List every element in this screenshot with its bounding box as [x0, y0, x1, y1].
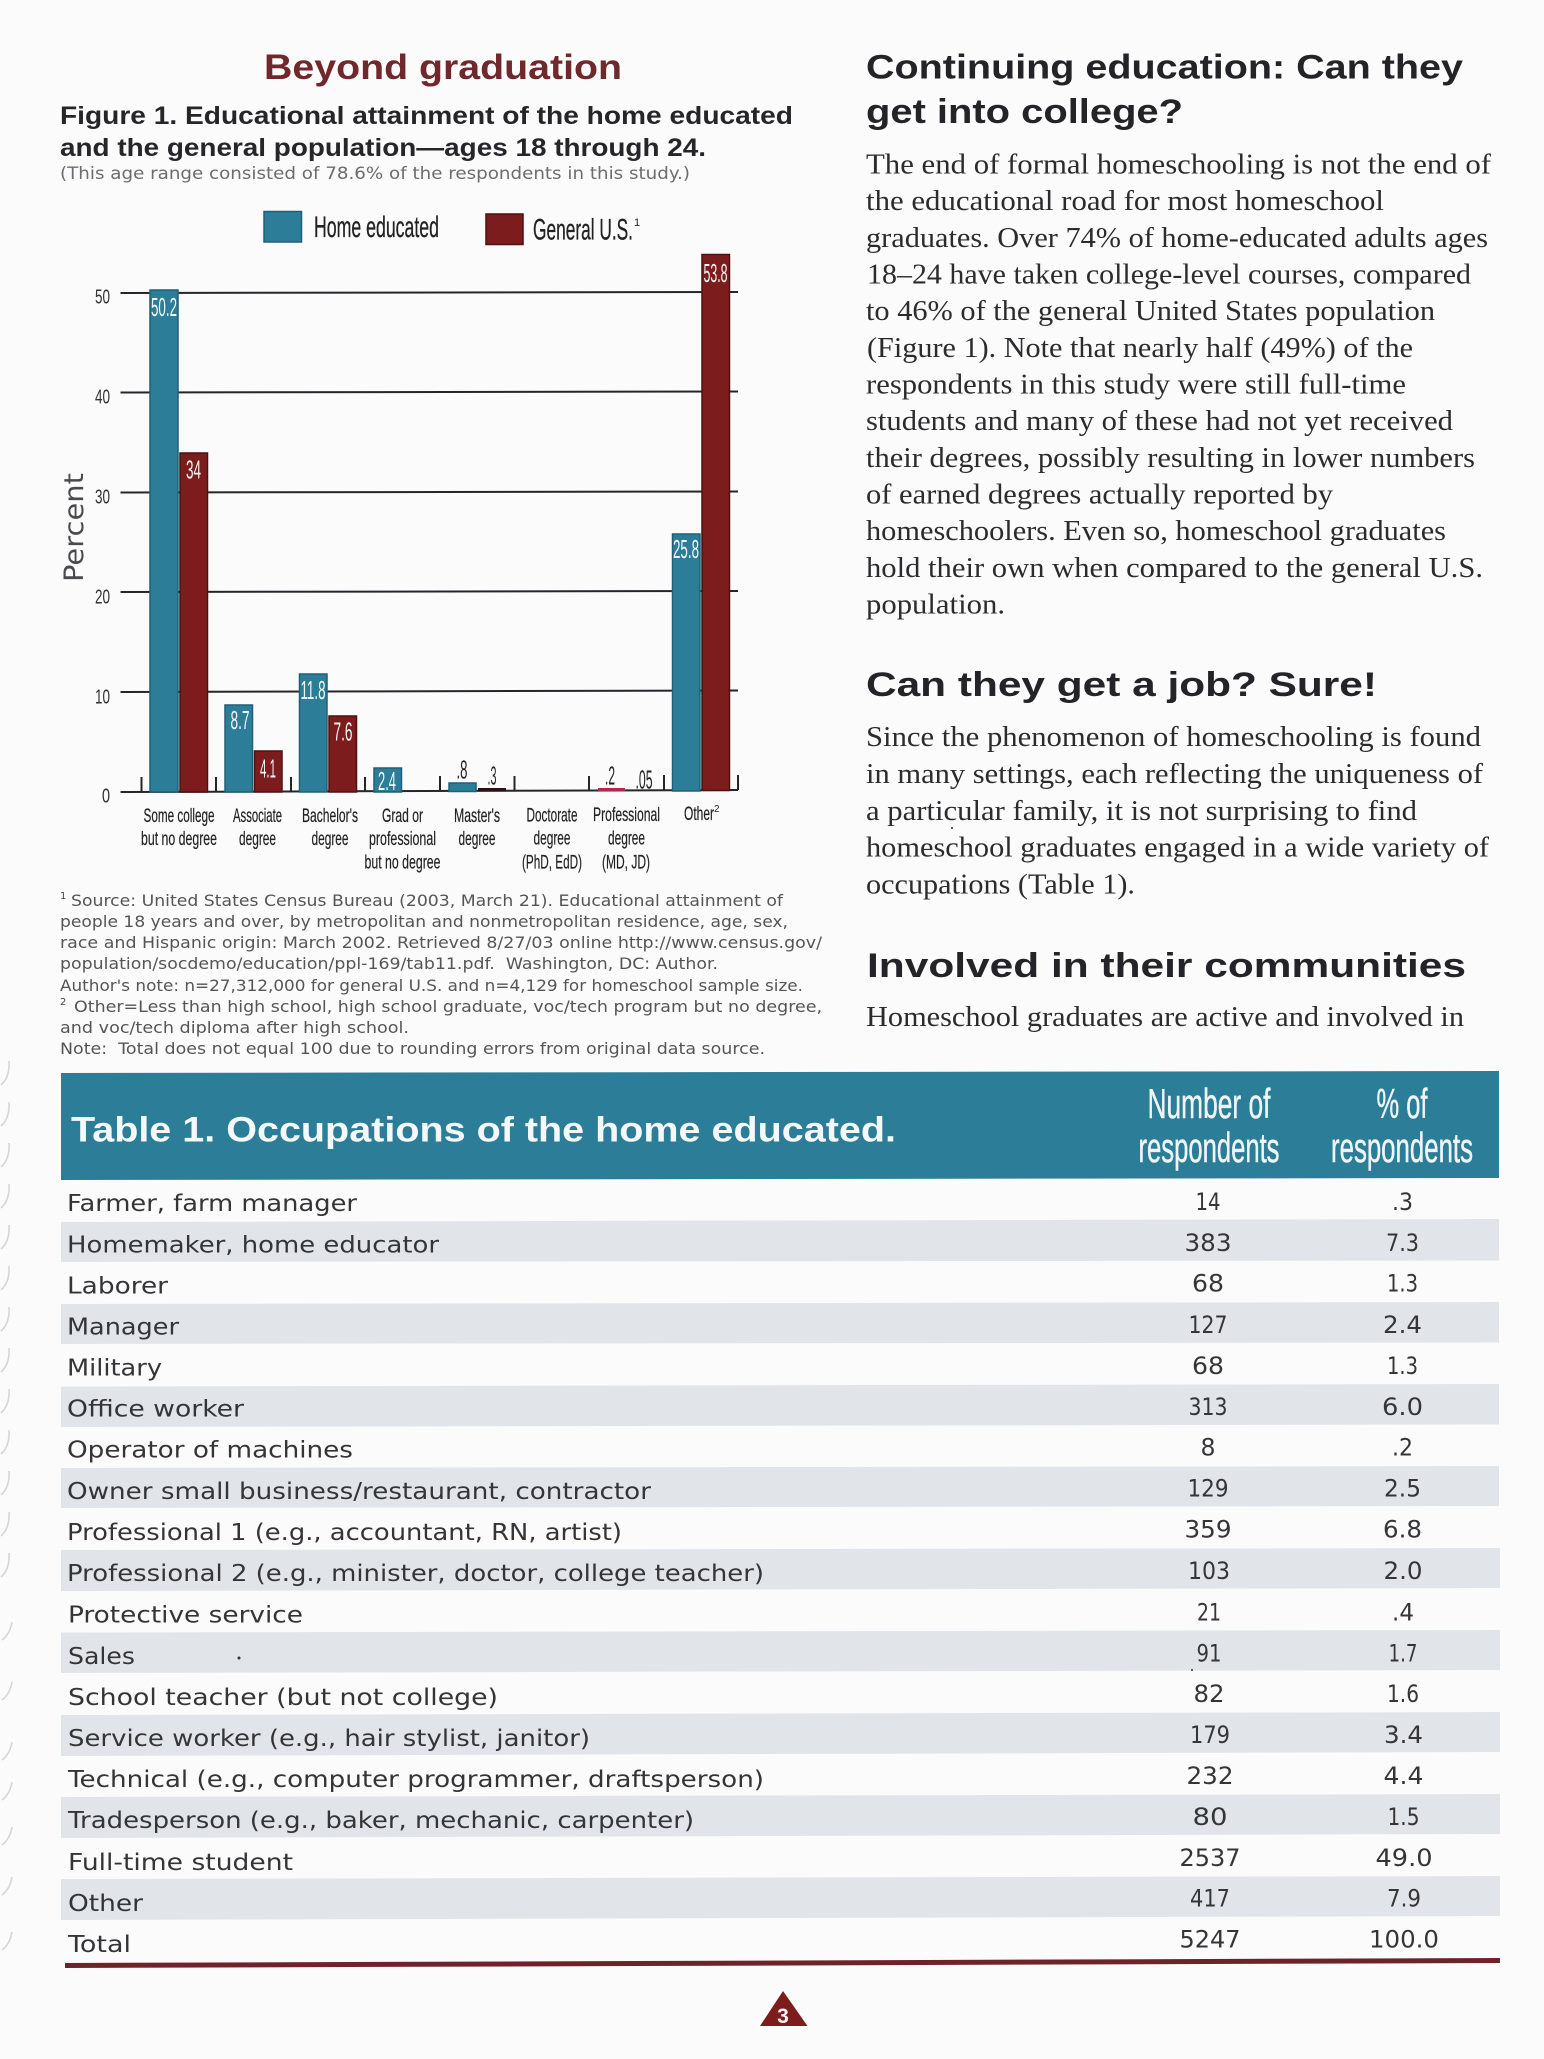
row: technical: 232	[1186, 1762, 1234, 1790]
chart footnotes: Other=Less than high school, high school graduate, voc/tech program but no degree,	[74, 997, 822, 1016]
column header: percent of respondents	[1331, 1080, 1473, 1171]
table title: Table 1. Occupations of the home educated.	[71, 1110, 896, 1150]
row: military: 68	[1192, 1352, 1224, 1380]
row: sales	[68, 1640, 1418, 1670]
text block: continuing education: homeschoolers. Even so, homeschool graduates	[866, 515, 1446, 547]
page number: 3	[777, 2005, 789, 2028]
row: military: Military	[67, 1356, 162, 1382]
legend swatch: general U.S.	[486, 214, 523, 244]
row: farmer: .3	[1392, 1188, 1413, 1216]
bars: professional	[598, 760, 652, 794]
row: professional 1: Professional 1 (e.g., accountant, RN, artist)	[67, 1520, 622, 1546]
chart footnotes: Note: Total does not equal 100 due to rounding errors from original data source.	[60, 1039, 765, 1058]
chart footnotes: Author's note: n=27,312,000 for general U.S. and n=4,129 for homeschool sample size.	[60, 976, 803, 995]
table bottom rule	[65, 1958, 1500, 1968]
row: military: 1.3	[1387, 1352, 1418, 1380]
text block: continuing education: hold their own when compared to the general U.S.	[866, 552, 1483, 584]
row: homemaker	[67, 1229, 1419, 1258]
y axis tick labels: 50	[95, 286, 110, 308]
bars: bachelor's: 7.6	[334, 716, 352, 746]
x axis category labels: Other	[684, 803, 714, 825]
heading: continuing education: Continuing education: Can they	[866, 48, 1463, 86]
chart footnotes: 1	[60, 891, 66, 902]
x axis category labels: Some college	[144, 805, 214, 827]
row: manager: 2.4	[1383, 1311, 1422, 1339]
table: occupations of the home educated	[61, 1071, 1500, 1968]
row: office worker: 6.0	[1382, 1393, 1423, 1421]
row: farmer: Farmer, farm manager	[67, 1191, 358, 1217]
column header: percent of respondents: % of	[1376, 1080, 1428, 1127]
row: protective service: Protective service	[68, 1602, 303, 1628]
text block: continuing education: students and many of these had not yet received	[866, 405, 1454, 437]
row: professional 2	[67, 1557, 1422, 1587]
figure subtitle: (This age range consisted of 78.6% of the respondents in this study.)	[60, 164, 690, 184]
row: operator	[67, 1434, 1413, 1464]
row: other: Other	[68, 1891, 144, 1917]
row: service worker: Service worker (e.g., hair stylist, janitor)	[68, 1726, 590, 1752]
figure title block	[60, 102, 793, 184]
bars: master's	[449, 754, 506, 792]
column header: number of respondents	[1138, 1080, 1280, 1171]
x axis category labels: Associate	[233, 805, 282, 827]
x axis category labels: degree	[608, 828, 645, 850]
chart footnotes: Source: United States Census Bureau (2003, March 21). Educational attainment of	[71, 891, 783, 910]
icon: triangle	[760, 1991, 808, 2026]
x axis category labels: professional	[369, 828, 436, 850]
row: owner: 129	[1188, 1474, 1228, 1502]
text block: continuing education: population.	[866, 588, 1005, 620]
heading: can they get a job: Can they get a job? Sure!	[866, 666, 1377, 704]
row: school teacher: School teacher (but not college)	[68, 1685, 498, 1711]
row: office worker	[67, 1393, 1423, 1422]
text block: continuing education: respondents in this study were still full-time	[866, 368, 1406, 400]
bars: other: 53.8	[704, 258, 728, 288]
legend swatch: home educated	[264, 212, 302, 242]
row: farmer: 14	[1196, 1188, 1220, 1216]
row: full-time student	[68, 1844, 1432, 1876]
row: operator: .2	[1392, 1434, 1413, 1462]
x axis category labels: Bachelor's	[302, 805, 358, 827]
row: operator: 8	[1200, 1434, 1216, 1462]
heading: Beyond graduation: Beyond graduation	[264, 48, 622, 87]
row: office worker: 313	[1188, 1393, 1228, 1421]
row: owner: 2.5	[1384, 1474, 1421, 1502]
row: military	[67, 1352, 1418, 1382]
bar chart: educational attainment: .05	[636, 764, 652, 794]
heading: involved in their communities: Involved in their communities	[867, 947, 1466, 985]
row: full-time student: 2537	[1180, 1844, 1240, 1872]
row: office worker: Office worker	[67, 1396, 245, 1422]
bar chart: educational attainment	[59, 254, 738, 874]
row: manager: 127	[1188, 1311, 1228, 1339]
y axis tick labels: 20	[95, 586, 110, 608]
chart footnotes: people 18 years and over, by metropolitan and nonmetropolitan residence, age, sex,	[60, 912, 788, 931]
chart footnotes: population/socdemo/education/ppl-169/tab11.pdf. Washington, DC: Author.	[60, 954, 718, 973]
row: protective service	[68, 1598, 1414, 1628]
x axis category labels: (MD, JD)	[602, 852, 650, 874]
bars: bachelor's	[300, 674, 356, 792]
row: laborer: 68	[1192, 1270, 1224, 1298]
row: total	[67, 1926, 1439, 1958]
text block: continuing education: to 46% of the general United States population	[866, 295, 1436, 327]
row: laborer	[67, 1270, 1418, 1300]
row: professional 2: Professional 2 (e.g., minister, doctor, college teacher)	[67, 1561, 764, 1587]
y axis tick labels: 0	[102, 786, 110, 808]
y axis tick labels	[95, 286, 110, 808]
row: tradesperson: 80	[1192, 1803, 1228, 1831]
row: farmer	[67, 1188, 1413, 1217]
row: technical: Technical (e.g., computer programmer, draftsperson)	[67, 1767, 764, 1793]
text block: continuing education: 18–24 have taken college-level courses, compared	[867, 258, 1472, 290]
text block: continuing education: graduates. Over 74% of home-educated adults ages	[866, 222, 1488, 254]
bars: associate	[225, 705, 282, 792]
row: service worker	[68, 1721, 1423, 1752]
row: other: 417	[1190, 1884, 1230, 1912]
bars: master's: .3	[488, 760, 496, 790]
x axis category labels: Doctorate	[526, 804, 578, 826]
bars: grad or professional	[374, 766, 402, 796]
row: service worker: 3.4	[1384, 1721, 1423, 1749]
text block: can they get a job: homeschool graduates engaged in a wide variety of	[866, 832, 1489, 864]
row: total: 5247	[1180, 1926, 1240, 1954]
row: professional 2: 103	[1188, 1557, 1230, 1585]
row: full-time student: 49.0	[1376, 1844, 1432, 1872]
text block: continuing education: (Figure 1). Note that nearly half (49%) of the	[867, 332, 1413, 364]
x axis category labels: 2	[714, 804, 720, 815]
text block: can they get a job: Since the phenomenon of homeschooling is found	[866, 721, 1482, 753]
x axis category labels: Grad or	[382, 805, 423, 827]
figure title line 2: and the general population—ages 18 through 24.	[60, 134, 706, 162]
text block: can they get a job: occupations (Table 1).	[866, 868, 1135, 900]
row: professional 2: 2.0	[1384, 1557, 1422, 1585]
row: homemaker: 7.3	[1386, 1229, 1419, 1257]
bars: other	[672, 254, 730, 791]
text block: can they get a job	[866, 721, 1489, 900]
column header: number of respondents: Number of	[1148, 1080, 1271, 1127]
row: service worker: 179	[1190, 1721, 1230, 1749]
y axis tick labels: 40	[95, 386, 110, 408]
row: owner	[67, 1474, 1421, 1505]
row: sales: Sales	[68, 1644, 135, 1670]
x axis category labels: degree	[239, 828, 276, 850]
row: operator: Operator of machines	[67, 1438, 353, 1464]
chart footnotes: 2	[60, 997, 66, 1008]
column header: number of respondents: respondents	[1138, 1124, 1280, 1171]
table header	[61, 1071, 1499, 1180]
chart footnotes	[60, 891, 823, 1058]
text block: continuing education: their degrees, possibly resulting in lower numbers	[866, 442, 1475, 474]
row: sales: 91	[1196, 1640, 1222, 1668]
row: school teacher	[68, 1680, 1419, 1711]
row: protective service: 21	[1197, 1598, 1221, 1626]
row: other	[68, 1884, 1421, 1917]
y axis tick labels: 10	[95, 686, 110, 708]
x axis category labels: Professional	[593, 804, 660, 826]
text block: can they get a job: a particular family, it is not surprising to find	[866, 795, 1418, 827]
row: school teacher: 82	[1194, 1680, 1224, 1708]
heading: continuing education: get into college?	[866, 93, 1183, 131]
text block: continuing education: the educational road for most homeschool	[866, 185, 1384, 217]
row: homemaker: 383	[1184, 1229, 1232, 1257]
bars: associate: 8.7	[230, 705, 250, 735]
text block: continuing education: The end of formal homeschooling is not the end of	[866, 148, 1491, 180]
bars: master's: .8	[456, 754, 468, 784]
bars: some college: 50.2	[151, 292, 177, 322]
page number marker	[760, 1991, 808, 2028]
chart footnotes: and voc/tech diploma after high school.	[60, 1018, 409, 1037]
x axis category labels: (PhD, EdD)	[522, 852, 582, 874]
y axis title: Percent	[59, 473, 90, 582]
y axis tick labels: 30	[95, 486, 110, 508]
chart footnotes: race and Hispanic origin: March 2002. Retrieved 8/27/03 online http://www.census.gov/	[60, 933, 823, 952]
legend label: home educated: Home educated	[314, 211, 439, 244]
row: laborer: Laborer	[67, 1274, 169, 1300]
legend label: general U.S.: General U.S.	[533, 214, 633, 246]
row: professional 1: 6.8	[1383, 1516, 1422, 1544]
row: homemaker: Homemaker, home educator	[67, 1232, 440, 1258]
row: total: 100.0	[1369, 1926, 1439, 1954]
bars: some college	[150, 290, 208, 792]
row: professional 1: 359	[1184, 1516, 1232, 1544]
row: tradesperson	[67, 1803, 1420, 1834]
x axis category labels: degree	[312, 828, 348, 850]
text block: continuing education	[866, 148, 1491, 620]
row: technical: 4.4	[1384, 1762, 1424, 1790]
figure title: Figure 1. Educational attainment of the home educated	[60, 102, 793, 130]
row: tradesperson: 1.5	[1388, 1803, 1420, 1831]
text block: continuing education: of earned degrees actually reported by	[866, 478, 1334, 510]
row: laborer: 1.3	[1387, 1270, 1418, 1298]
row: other: 7.9	[1387, 1884, 1421, 1912]
text block: can they get a job: in many settings, each reflecting the uniqueness of	[866, 758, 1483, 790]
text block: involved in their communities: Homeschool graduates are active and involved in	[866, 1001, 1465, 1033]
legend footnote marker: 1	[634, 217, 640, 229]
row: professional 1	[67, 1516, 1422, 1546]
bars: bachelor's: 11.8	[300, 675, 326, 705]
row: protective service: .4	[1392, 1598, 1414, 1626]
bars: some college: 34	[186, 454, 201, 484]
row: full-time student: Full-time student	[68, 1850, 293, 1876]
row: manager	[67, 1311, 1422, 1340]
x axis category labels: but no degree	[141, 828, 217, 850]
bars: professional: .2	[605, 760, 615, 790]
row: tradesperson: Tradesperson (e.g., baker, mechanic, carpenter)	[67, 1808, 694, 1834]
bars: associate: 4.1	[260, 754, 276, 784]
row: sales: 1.7	[1388, 1640, 1418, 1668]
bars: other: 25.8	[673, 534, 699, 564]
x axis category labels: Master's	[454, 805, 500, 827]
x axis category labels: but no degree	[364, 852, 440, 874]
row: school teacher: 1.6	[1387, 1680, 1419, 1708]
row: manager: Manager	[67, 1314, 180, 1340]
row: total: Total	[67, 1932, 131, 1958]
chart legend	[264, 211, 640, 246]
row: technical	[67, 1762, 1424, 1793]
row: owner: Owner small business/restaurant, contractor	[67, 1479, 652, 1505]
x axis category labels: degree	[534, 828, 570, 850]
bars: grad or professional: 2.4	[378, 766, 396, 796]
heading: continuing education	[866, 48, 1463, 131]
x axis category labels: degree	[458, 828, 496, 850]
x axis category labels	[141, 803, 720, 874]
